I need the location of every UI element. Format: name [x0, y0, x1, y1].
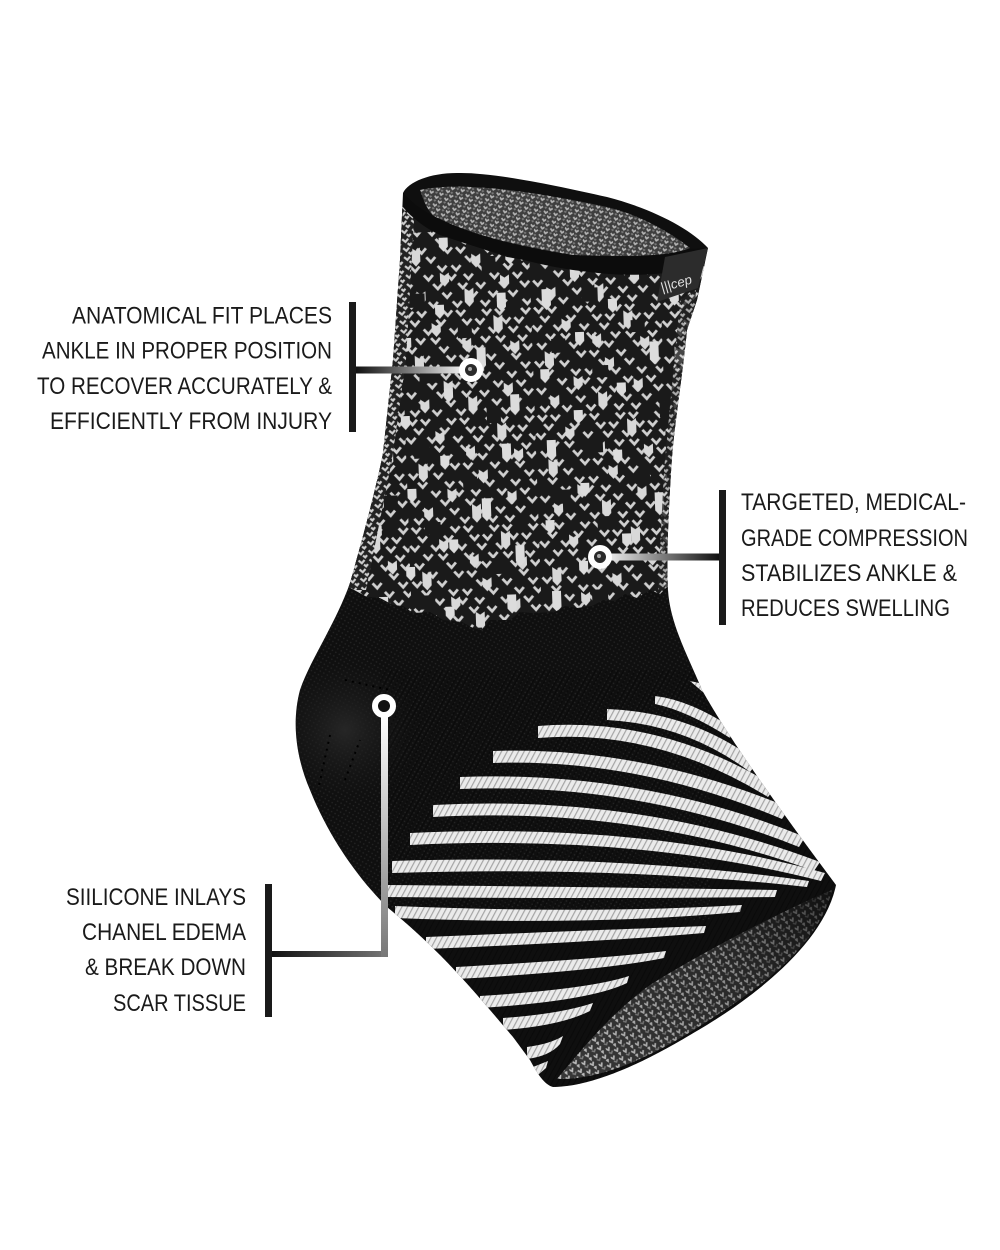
connector	[356, 366, 470, 374]
text block	[66, 884, 246, 1017]
text block: ANATOMICAL FIT PLACES	[72, 302, 332, 330]
marker	[375, 697, 393, 715]
sleeve base	[296, 173, 836, 1087]
text block: REDUCES SWELLING	[741, 595, 950, 622]
lining shading	[557, 890, 832, 1079]
text block: SIILICONE INLAYS	[66, 884, 246, 911]
callout: anatomical fit	[37, 302, 480, 435]
ankle sleeve product	[270, 173, 850, 1090]
vertical bar	[265, 884, 272, 1017]
marker	[591, 548, 609, 566]
front rim band	[403, 193, 708, 275]
text block: CHANEL EDEMA	[82, 919, 246, 946]
text block	[741, 489, 968, 622]
text block: & BREAK DOWN	[85, 954, 246, 981]
marker	[462, 361, 480, 379]
marker ring	[591, 548, 609, 566]
marker ring	[462, 361, 480, 379]
text block: TARGETED, MEDICAL-	[741, 489, 966, 516]
connector	[600, 554, 719, 560]
connector vertical	[381, 715, 388, 957]
connector horizontal	[272, 951, 388, 957]
bottom opening lining	[557, 890, 832, 1079]
text block: TO RECOVER ACCURATELY &	[37, 373, 332, 400]
knit pattern section	[340, 190, 710, 640]
heel texture	[296, 589, 710, 920]
marker centre	[597, 554, 601, 558]
text block: SCAR TISSUE	[113, 990, 246, 1017]
callout: compression	[591, 489, 968, 625]
brand tag text: |||cep	[659, 272, 694, 295]
diagonal stripes	[380, 670, 850, 1090]
text block: EFFICIENTLY FROM INJURY	[50, 408, 332, 435]
lining knit	[557, 890, 832, 1079]
callout: silicone inlays	[66, 697, 393, 1017]
text block: STABILIZES ANKLE &	[741, 560, 957, 587]
text block	[37, 302, 332, 435]
top opening lining	[420, 187, 690, 256]
brand tag	[657, 248, 708, 302]
marker centre	[468, 367, 472, 371]
tag fabric	[657, 248, 708, 302]
vertical bar	[719, 490, 726, 625]
vertical bar	[349, 302, 356, 432]
stitch overlay	[380, 670, 850, 1090]
text block: ANKLE IN PROPER POSITION	[42, 338, 332, 364]
